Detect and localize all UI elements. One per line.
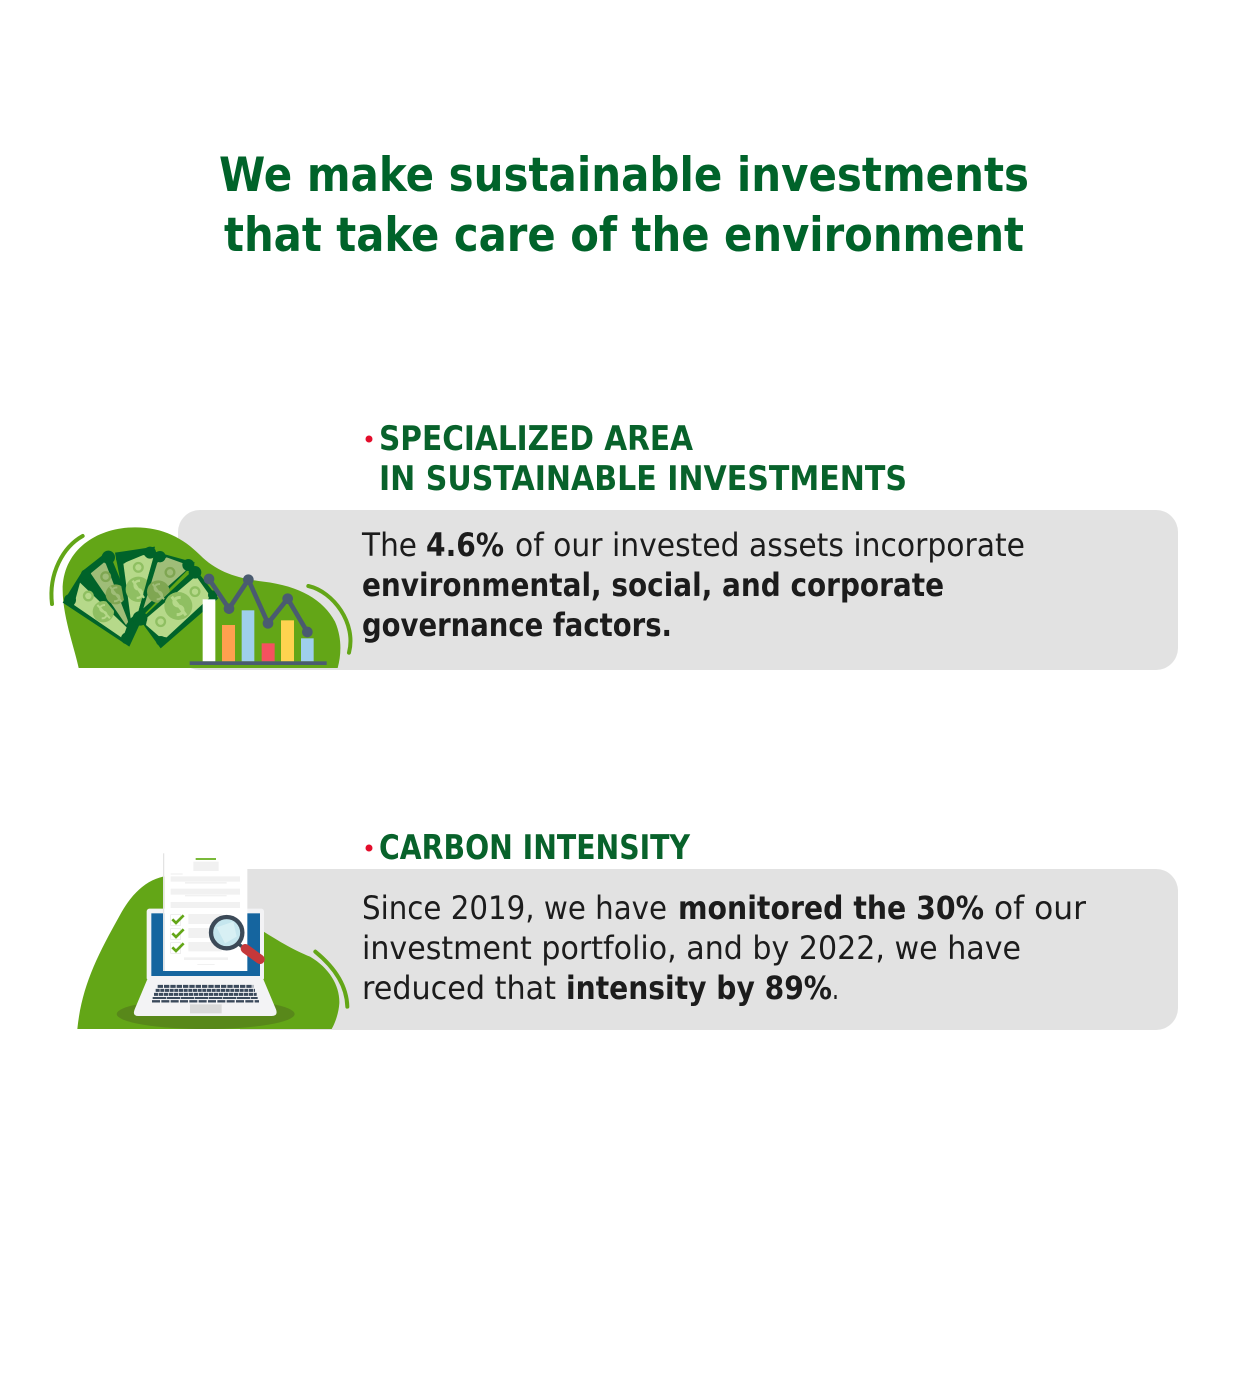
text block: carbon monitoring: investment portfolio, and by 2022, we have: [362, 929, 1021, 967]
icon: laptop with report and magnifier: [77, 853, 347, 1029]
title: that take care of the environment: [224, 208, 1024, 263]
line chart: [204, 574, 313, 637]
icon: money and falling chart: [51, 527, 350, 668]
magnifier: [211, 917, 260, 959]
note 2: [81, 551, 138, 628]
text block: carbon monitoring: intensity by 89%: [566, 969, 832, 1007]
text block: carbon monitoring: Since 2019, we have: [362, 889, 667, 927]
bar chart: [190, 599, 327, 665]
text block: invested assets: [361, 526, 1025, 644]
text block: invested assets: of our invested assets incorporate: [515, 526, 1025, 564]
heading: specialized area: IN SUSTAINABLE INVESTMENTS: [379, 459, 907, 499]
laptop: [134, 909, 277, 1016]
note 3: [115, 547, 156, 623]
text block: invested assets: The: [361, 526, 417, 564]
report document: [163, 853, 247, 971]
text block: carbon monitoring: .: [832, 969, 839, 1007]
title: [219, 148, 1029, 263]
heading: carbon intensity: CARBON INTENSITY: [379, 828, 690, 868]
text block: invested assets: 4.6%: [426, 526, 504, 564]
title: We make sustainable investments: [219, 148, 1029, 203]
text block: invested assets: environmental, social, and corporate: [362, 566, 944, 604]
section: specialized area: [51, 419, 1178, 670]
panel: carbon intensity text background: [240, 869, 1178, 1030]
heading: specialized area: [366, 419, 907, 499]
note 4: [138, 551, 195, 615]
section: carbon intensity: [77, 828, 1178, 1030]
banknote fan: [63, 547, 218, 648]
note 5: [133, 566, 218, 648]
text block: carbon monitoring: monitored the 30%: [678, 889, 984, 927]
text block: carbon monitoring: reduced that: [362, 969, 556, 1007]
text block: invested assets: governance factors.: [362, 606, 672, 644]
panel: specialized area text background: [178, 510, 1178, 670]
text block: carbon monitoring: [362, 889, 1087, 1007]
text block: carbon monitoring: of our: [994, 889, 1087, 927]
heading: specialized area: SPECIALIZED AREA: [379, 419, 694, 459]
note 1: [63, 571, 142, 647]
